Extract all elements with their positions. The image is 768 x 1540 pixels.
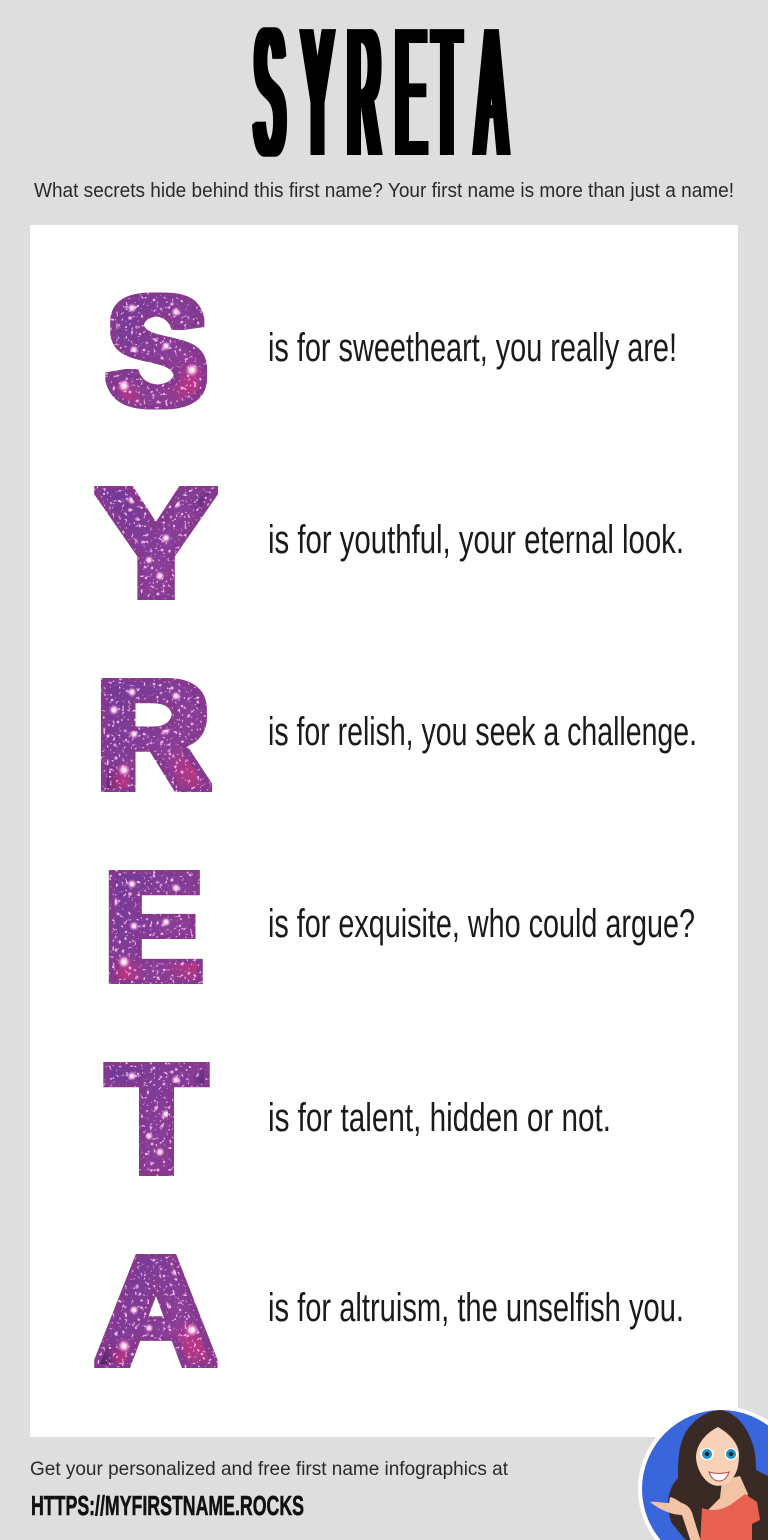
row: letter S: [107, 265, 677, 437]
subtitle: What secrets hide behind this first name? Your first name is more than just a name!: [34, 180, 734, 202]
letter S: S: [107, 265, 207, 437]
panel: name letters: [30, 225, 738, 1437]
footer text: Get your personalized and free first name infographics at: [30, 1458, 509, 1480]
row: letter E: [105, 841, 695, 1013]
letter E: E: [105, 841, 202, 1013]
footer url: HTTPS://MYFIRSTNAME.ROCKS: [31, 1490, 304, 1521]
letter T: T: [108, 1033, 206, 1205]
line for T: is for talent, hidden or not.: [268, 1096, 611, 1140]
letter A: A: [96, 1225, 216, 1397]
letter R: R: [96, 649, 210, 821]
row: letter T: [108, 1033, 611, 1205]
icon: avatar: [638, 1406, 768, 1540]
letter Y: Y: [97, 457, 215, 629]
row: letter Y: [97, 457, 684, 629]
row: letter A: [96, 1225, 684, 1397]
row: letter R: [96, 649, 697, 821]
